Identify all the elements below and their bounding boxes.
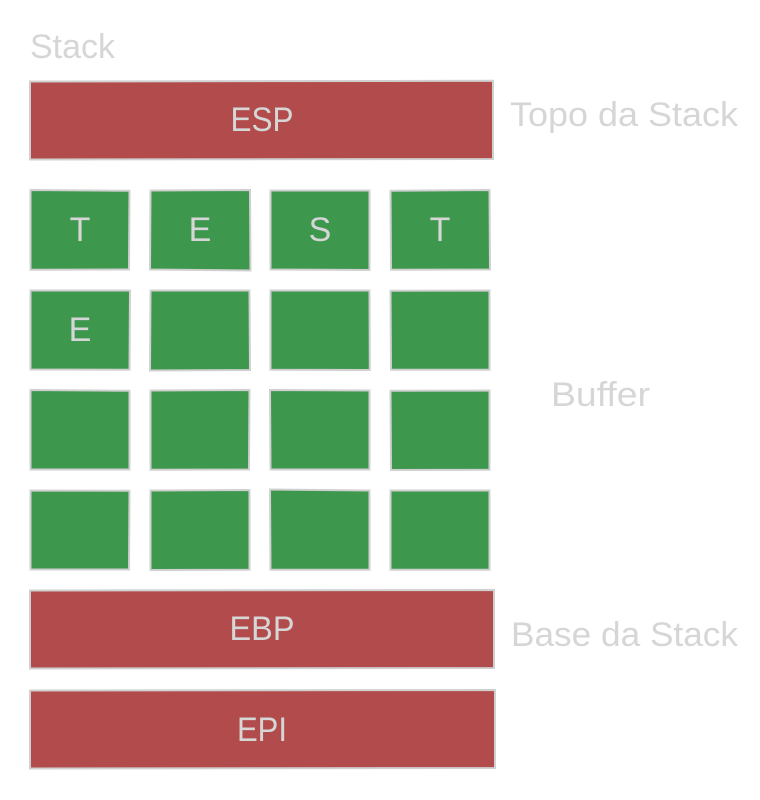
buffer cell: E: E xyxy=(69,311,91,349)
buffer cell: empty xyxy=(270,390,370,470)
buffer cell: empty xyxy=(270,290,370,370)
buffer cell: T xyxy=(30,190,130,270)
buffer cell: S xyxy=(270,190,370,270)
buffer cell: T: T xyxy=(430,211,450,249)
buffer cell: E xyxy=(30,290,130,370)
buffer cell: T xyxy=(390,190,490,270)
register: EBP xyxy=(30,590,494,668)
buffer cell: empty xyxy=(150,290,250,370)
label: Buffer: Buffer xyxy=(551,376,650,414)
buffer grid xyxy=(30,190,490,570)
buffer cell: empty xyxy=(150,490,250,570)
buffer cell: S: S xyxy=(309,211,331,249)
buffer cell: empty xyxy=(390,390,490,470)
register: EBP: EBP xyxy=(230,610,294,648)
buffer cell: E: E xyxy=(189,211,211,249)
register: EPI: EPI xyxy=(237,711,287,749)
register: EPI xyxy=(30,690,495,768)
buffer cell: empty xyxy=(150,390,250,470)
buffer cell: empty xyxy=(390,290,490,370)
register: ESP xyxy=(30,81,493,160)
buffer cell: T: T xyxy=(70,211,90,249)
register: ESP: ESP xyxy=(230,101,294,139)
buffer cell: E xyxy=(150,190,250,270)
title: Stack: Stack xyxy=(30,28,116,66)
buffer cell: empty xyxy=(30,490,130,570)
buffer cell: empty xyxy=(270,490,370,570)
label: Topo da Stack: Topo da Stack xyxy=(510,96,739,134)
label: Base da Stack: Base da Stack xyxy=(511,616,739,654)
buffer cell: empty xyxy=(30,390,130,470)
buffer cell: empty xyxy=(390,490,490,570)
